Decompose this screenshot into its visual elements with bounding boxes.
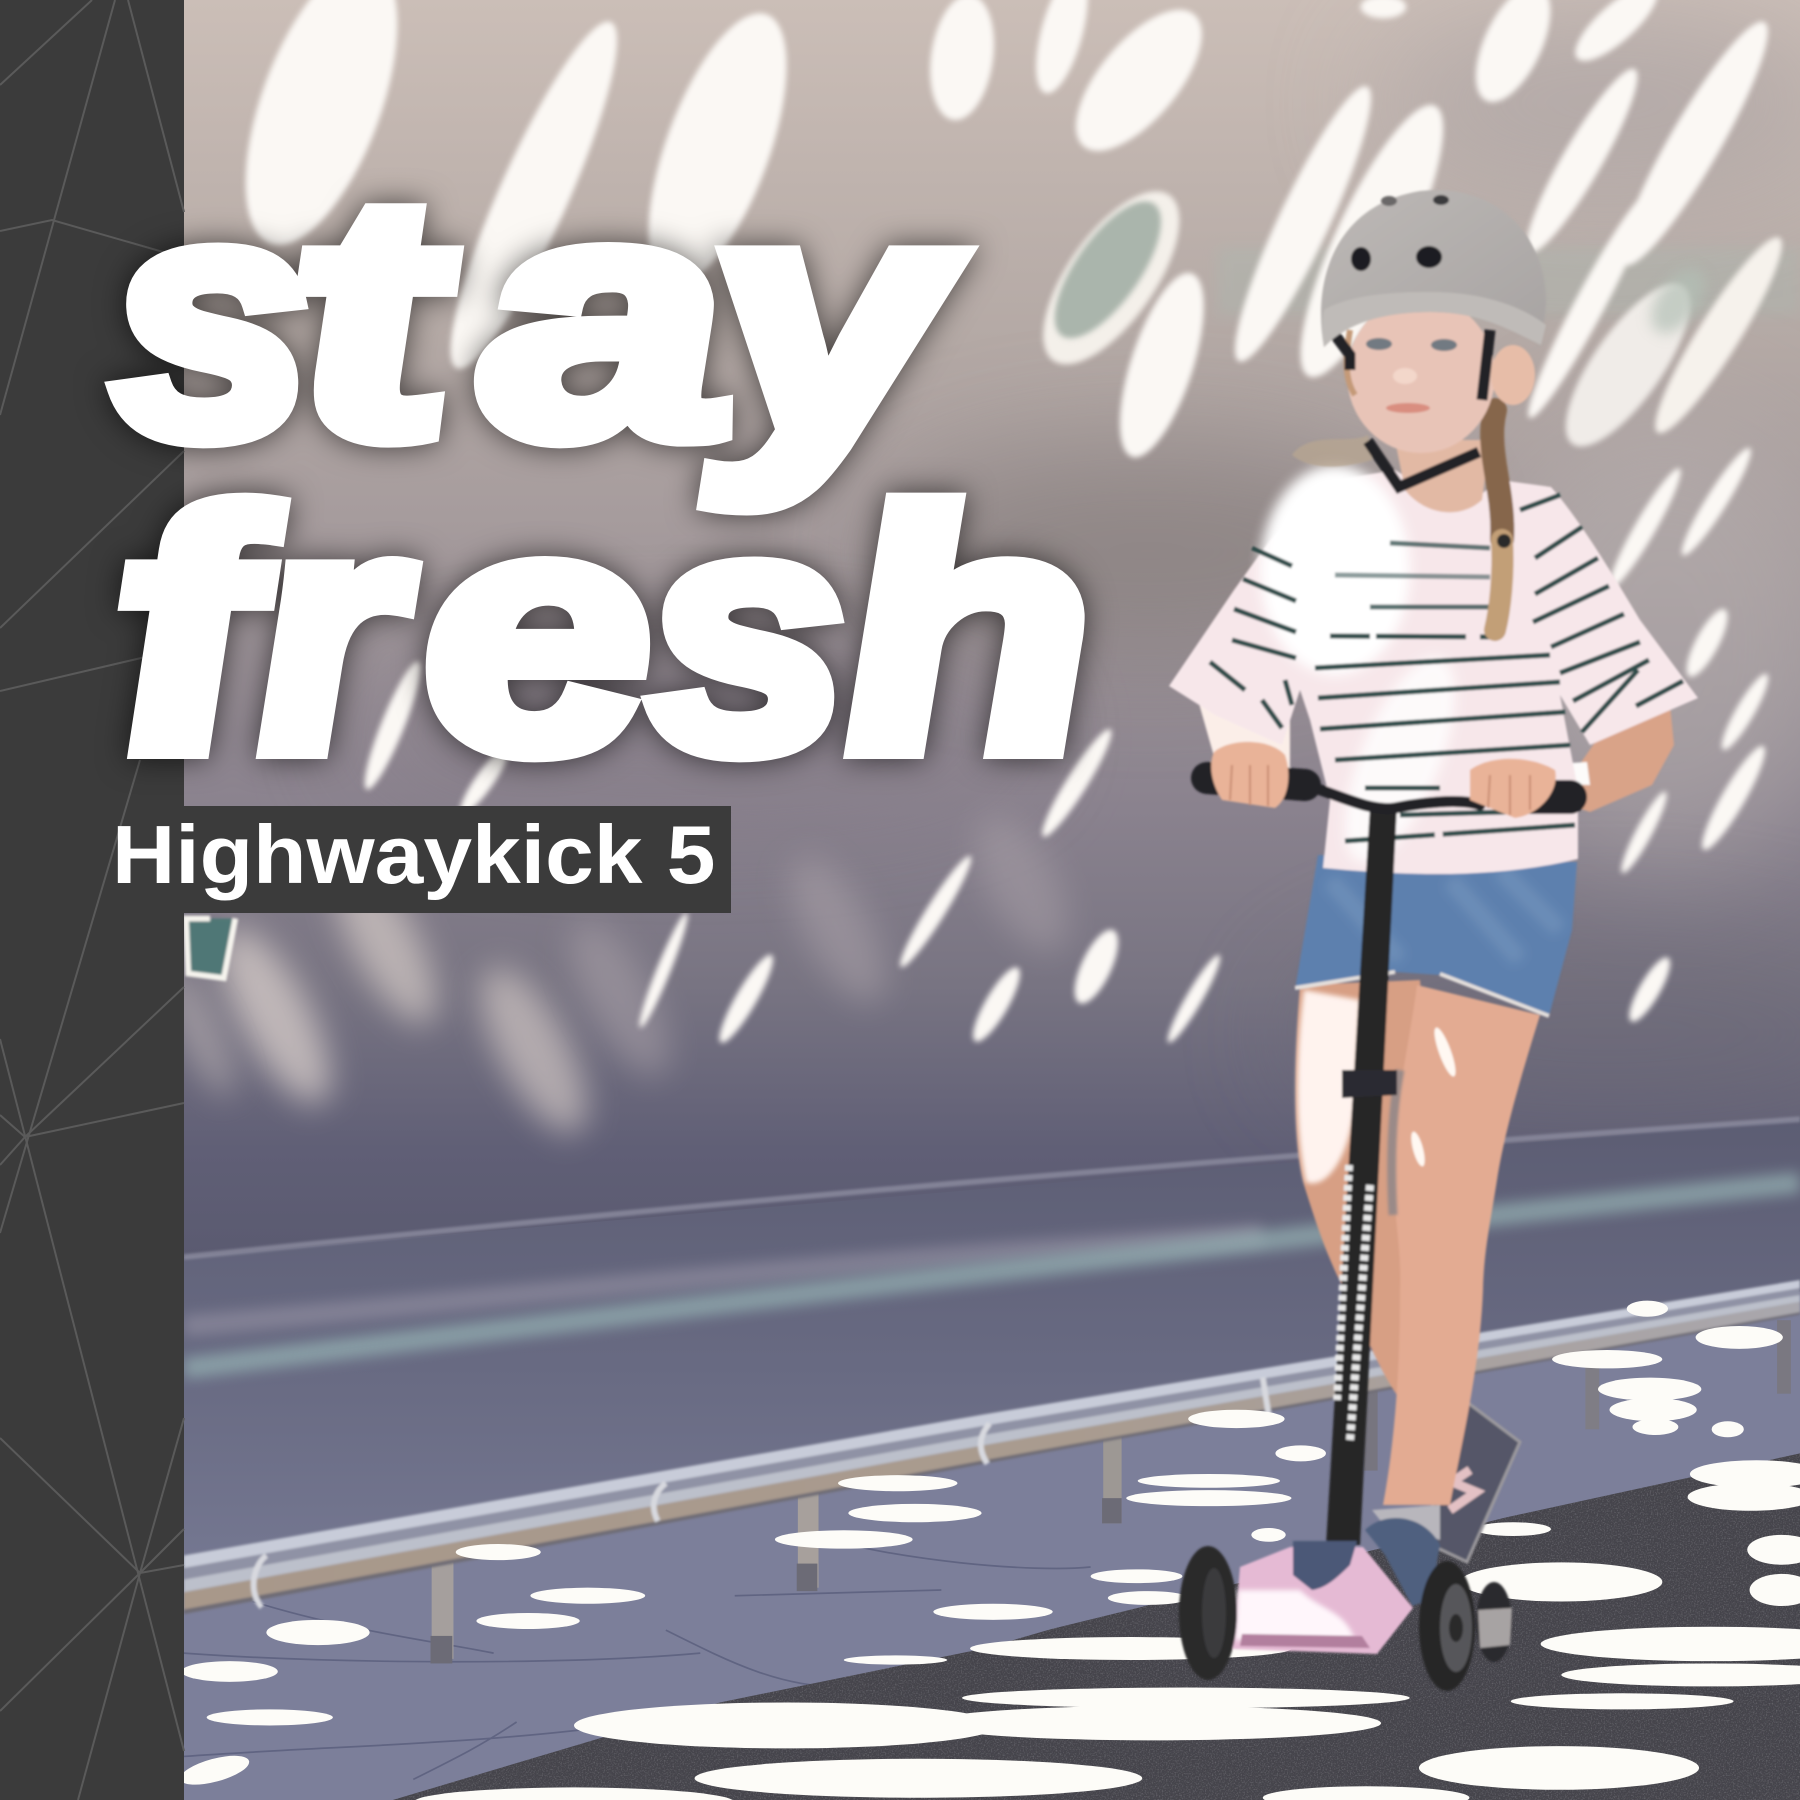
title: stay bbox=[101, 128, 990, 535]
front shoe and sock bbox=[1365, 1505, 1440, 1606]
rear leg and rear shoe bbox=[1295, 980, 1520, 1562]
stem lettering marks bbox=[1337, 1165, 1370, 1440]
title: fresh bbox=[100, 442, 1104, 822]
title: fresh: h bbox=[829, 442, 1104, 822]
road reflection bands bbox=[184, 1182, 1800, 1368]
neck bbox=[1395, 440, 1490, 512]
scooter stem bbox=[1326, 806, 1397, 1545]
wall slots bbox=[214, 0, 1786, 1048]
face bbox=[1347, 297, 1535, 453]
wall base light line bbox=[184, 1119, 1800, 1257]
denim shorts bbox=[1295, 855, 1577, 1016]
scooter deck bbox=[1233, 1541, 1413, 1654]
ground: road band bbox=[184, 1119, 1800, 1607]
title: fresh: r bbox=[247, 442, 407, 822]
subtitle: Highwaykick 5 bbox=[112, 808, 716, 901]
sunlight spots on the ground bbox=[177, 1301, 1800, 1800]
front leg bbox=[1383, 985, 1540, 1505]
wall ring slots bbox=[186, 170, 1797, 978]
asphalt path bbox=[393, 1453, 1800, 1800]
title: stay: t bbox=[274, 128, 460, 508]
helmet strap bbox=[1335, 330, 1490, 487]
arms bbox=[1198, 690, 1674, 812]
striped shirt bbox=[1169, 465, 1698, 877]
sidebar geometric line pattern bbox=[0, 0, 184, 1800]
guard rail bbox=[184, 1280, 1800, 1614]
sidebar panel bbox=[0, 0, 184, 1800]
helmet bbox=[1321, 190, 1546, 347]
pavement cracks bbox=[184, 1533, 1091, 1779]
scooter wheels bbox=[1179, 1546, 1512, 1691]
hands bbox=[1211, 742, 1556, 818]
braid bbox=[1492, 410, 1511, 630]
title: stay: a bbox=[458, 128, 743, 508]
handlebar bbox=[1207, 778, 1570, 809]
guard rail posts bbox=[430, 1320, 1791, 1663]
title: fresh: f bbox=[100, 442, 270, 822]
shirt stripes bbox=[1210, 495, 1683, 841]
ground: pavement bbox=[184, 1292, 1800, 1800]
girl on scooter bbox=[1169, 190, 1698, 1691]
title: stay: y bbox=[697, 128, 962, 508]
title: fresh: e bbox=[408, 442, 663, 822]
wall shading bbox=[155, 11, 1800, 1148]
knee shading bbox=[1392, 1070, 1400, 1215]
title: fresh: s bbox=[638, 442, 854, 822]
hair wisp bbox=[1292, 435, 1372, 467]
sun spots on leg bbox=[1409, 1026, 1460, 1168]
subtitle background box bbox=[184, 806, 731, 913]
title: stay: s bbox=[102, 128, 318, 508]
